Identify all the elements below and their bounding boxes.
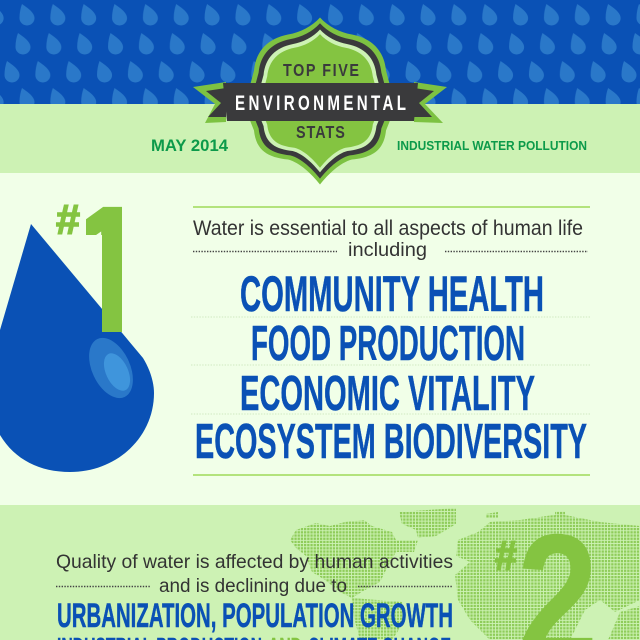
ribbon band [223, 83, 418, 121]
intro text second line: including [348, 240, 427, 261]
panel: stat 1 [0, 204, 590, 476]
top rule [193, 206, 590, 208]
badge shield layers [250, 18, 390, 184]
badge text: environmental: ENVIRONMENTAL [235, 90, 406, 115]
world map dots [290, 508, 640, 640]
numeral 1: 1 [64, 170, 155, 371]
bottom rule [193, 474, 590, 476]
badge: top five environmental stats [193, 18, 447, 184]
body text: Quality of water is affected by human activities [56, 551, 453, 573]
date label: MAY 2014 [151, 136, 229, 155]
number 2 [495, 498, 598, 640]
panel: stat 2 [0, 498, 640, 640]
badge text: stats: STATS [296, 123, 345, 142]
ribbon tails [193, 82, 447, 123]
hash sign: # [56, 196, 80, 243]
body text second line: and is declining due to [159, 576, 347, 597]
icon: water drop [0, 224, 154, 472]
intro text: Water is essential to all aspects of human life [193, 217, 583, 240]
header band [0, 104, 640, 173]
badge text: top five: TOP FIVE [283, 61, 359, 80]
number 1 [56, 204, 122, 332]
hash sign: # [495, 532, 517, 579]
topic label: INDUSTRIAL WATER POLLUTION [397, 139, 587, 153]
header background with rain drop pattern [0, 0, 640, 104]
